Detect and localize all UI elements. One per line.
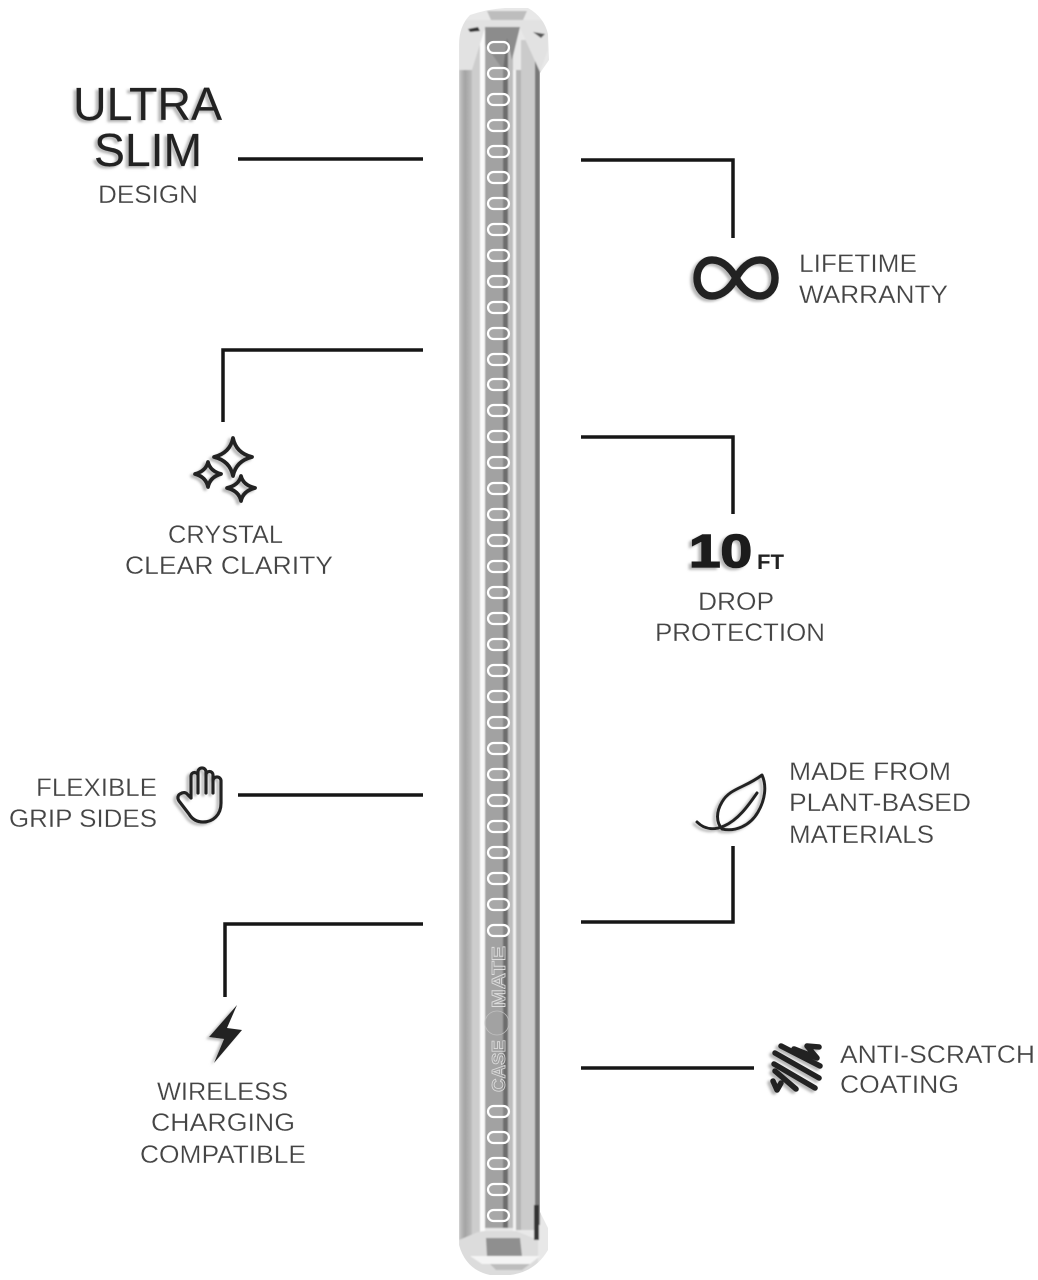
text: lifetime warranty — [799, 250, 948, 309]
heading: ultra slim design: DESIGN — [98, 181, 198, 209]
callout line: wireless charging — [225, 924, 423, 997]
text: drop protection — [655, 588, 825, 647]
icon: infinity — [697, 260, 775, 296]
text: made from plant-based materials — [789, 758, 971, 849]
text: anti-scratch coating — [840, 1041, 1035, 1099]
text: crystal clear clarity: CLEAR CLARITY — [125, 552, 333, 580]
text: flexible grip sides: FLEXIBLE — [36, 774, 157, 802]
callout line: ultra slim — [238, 157, 423, 161]
text: lifetime warranty: LIFETIME — [799, 250, 917, 278]
embossed brand mark: CASE — [489, 1040, 509, 1092]
icon: 10 ft badge — [689, 525, 784, 577]
icon: lightning bolt — [209, 1005, 242, 1063]
text: flexible grip sides: GRIP SIDES — [9, 805, 157, 833]
heading: ultra slim design: ULTRA — [73, 78, 222, 130]
icon: sparkles — [195, 438, 255, 501]
text: wireless charging compatible — [140, 1078, 306, 1169]
icon: 10 ft badge: 10 — [689, 525, 752, 577]
heading: ultra slim design: SLIM — [94, 124, 202, 176]
text: lifetime warranty: WARRANTY — [799, 281, 948, 309]
text: made from plant-based materials: MADE FROM — [789, 758, 951, 786]
heading: ultra slim design — [73, 78, 222, 209]
text: crystal clear clarity — [125, 521, 333, 580]
grip ridges — [488, 42, 509, 1221]
embossed brand mark — [485, 946, 509, 1092]
text: made from plant-based materials: MATERIALS — [789, 821, 934, 849]
text: wireless charging compatible: CHARGING — [151, 1109, 295, 1137]
callout line: flexible grip — [238, 793, 423, 797]
embossed brand mark: MATE — [489, 946, 509, 1008]
text: anti-scratch coating: ANTI-SCRATCH — [840, 1041, 1035, 1069]
phone case side view — [459, 8, 549, 1275]
text: drop protection: PROTECTION — [655, 619, 825, 647]
callout line: plant-based — [581, 846, 733, 922]
callout line: anti-scratch — [581, 1066, 754, 1070]
callout line: crystal clear — [223, 350, 423, 422]
text: anti-scratch coating: COATING — [840, 1071, 959, 1099]
text: crystal clear clarity: CRYSTAL — [168, 521, 283, 549]
callout line: lifetime warranty — [581, 160, 733, 238]
icon: scratch marks — [773, 1046, 820, 1090]
text: drop protection: DROP — [698, 588, 774, 616]
text: wireless charging compatible: WIRELESS — [157, 1078, 288, 1106]
text: flexible grip sides — [9, 774, 157, 833]
icon: 10 ft badge: FT — [757, 551, 784, 574]
callout line: drop protection — [581, 437, 733, 514]
text: made from plant-based materials: PLANT-BASED — [789, 789, 971, 817]
icon: hand — [178, 768, 221, 822]
icon: leaf — [697, 775, 765, 830]
text: wireless charging compatible: COMPATIBLE — [140, 1141, 306, 1169]
